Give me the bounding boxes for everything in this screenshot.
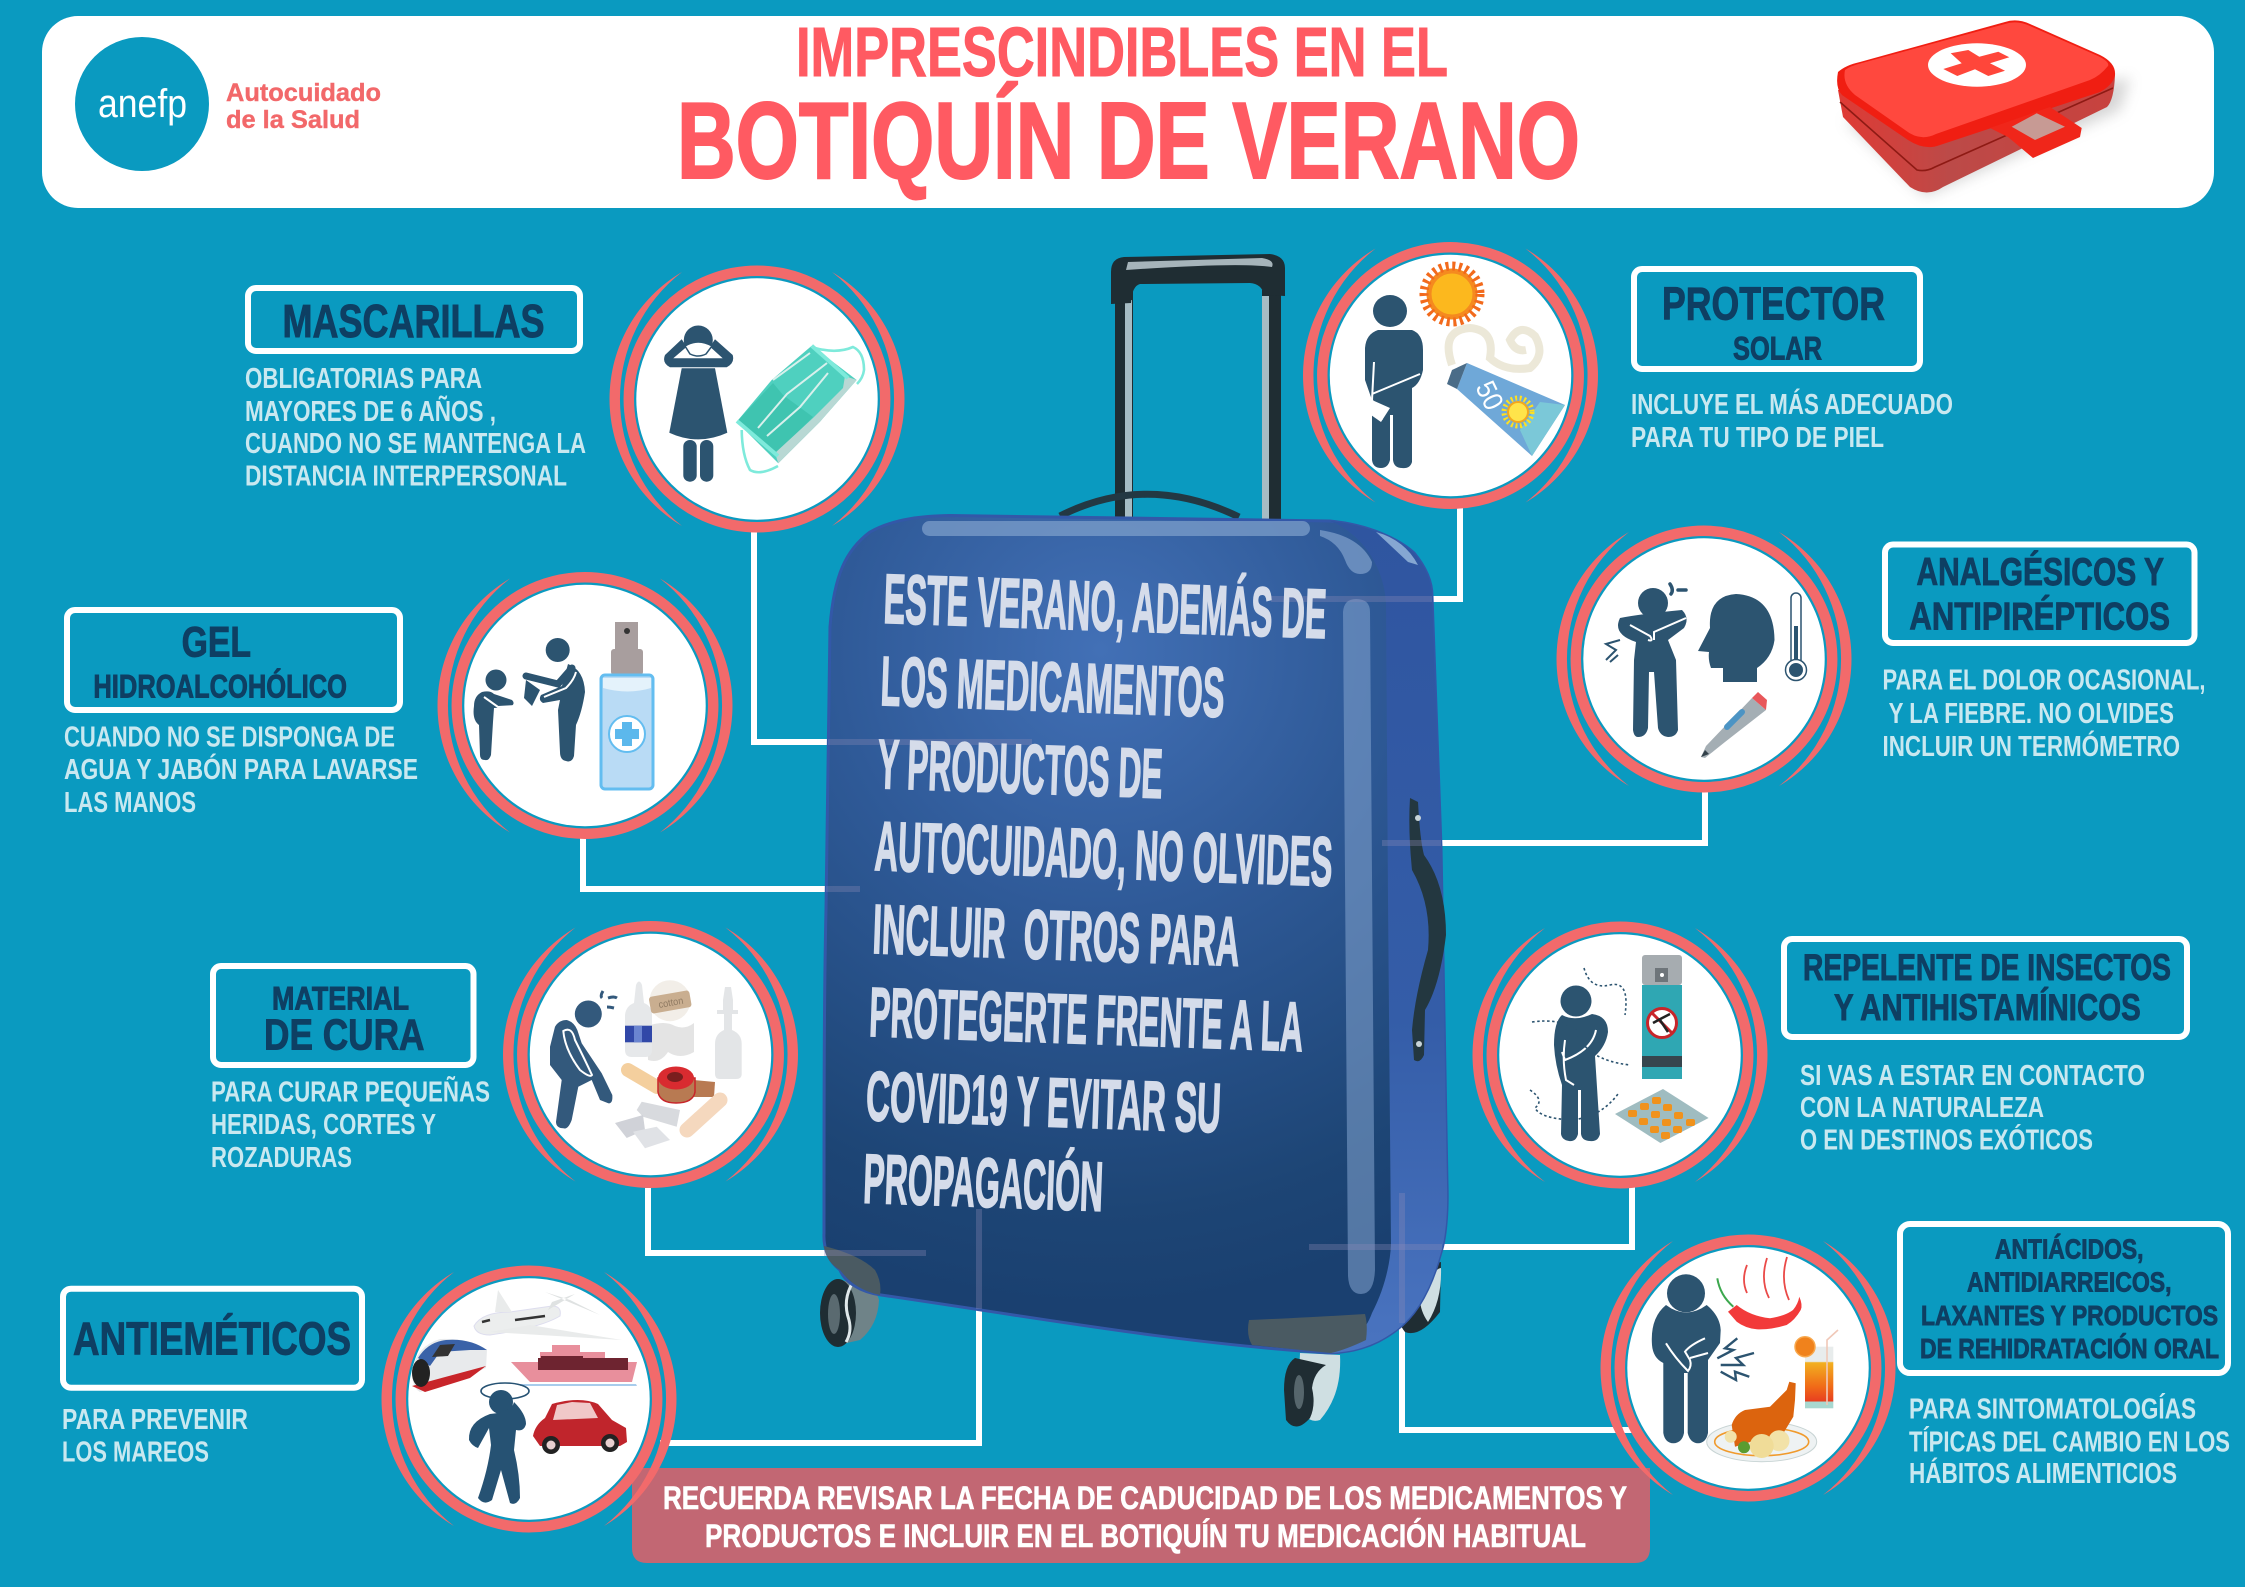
title: IMPRESCINDIBLES EN EL — [796, 13, 1448, 91]
dizzy person — [469, 1383, 529, 1504]
translucent connector overlays — [824, 596, 1442, 1323]
suitcase side panel — [1330, 521, 1447, 1353]
description — [62, 1404, 248, 1469]
heading box — [213, 966, 474, 1065]
description: ROZADURAS — [211, 1142, 352, 1174]
top carry handle — [1060, 494, 1239, 517]
car — [533, 1400, 627, 1454]
description: HÁBITOS ALIMENTICIOS — [1909, 1456, 2177, 1490]
suitcase: AUTOCUIDADO, NO OLVIDES — [873, 807, 1334, 901]
logo: anefp — [75, 37, 381, 171]
icon: injured person and first aid material — [503, 926, 798, 1183]
icon: first aid kit — [1837, 20, 2130, 196]
heading box: PROTECTOR — [1662, 278, 1885, 330]
callout banner: RECUERDA REVISAR LA FECHA DE CADUCIDAD DE LOS MEDICAMENTOS Y — [663, 1480, 1627, 1516]
panel: mascarillas — [245, 271, 904, 527]
heading box: Y ANTIHISTAMÍNICOS — [1834, 987, 2141, 1028]
description: INCLUYE EL MÁS ADECUADO — [1631, 387, 1953, 421]
suitcase: PROTEGERTE FRENTE A LA — [868, 973, 1305, 1066]
icon: adult, child and hand sanitizer — [438, 577, 732, 834]
icon: person with bites, repellent and pills — [1473, 927, 1767, 1183]
heading box: ANTIÁCIDOS, — [1995, 1233, 2144, 1264]
suitcase message: COVID19 Y EVITAR SU — [865, 1057, 1222, 1147]
description — [64, 721, 418, 819]
heading box — [67, 610, 400, 710]
heading box — [248, 288, 580, 351]
description: LOS MAREOS — [62, 1437, 209, 1469]
heading box: DE CURA — [264, 1010, 424, 1059]
panel: material de cura — [211, 926, 798, 1183]
suitcase — [820, 254, 1447, 1427]
description — [211, 1074, 490, 1174]
connector lines — [583, 508, 1705, 1443]
suitcase message: LOS MEDICAMENTOS — [879, 642, 1226, 732]
description: CUANDO NO SE DISPONGA DE — [64, 721, 395, 753]
side handle — [1409, 798, 1446, 1061]
heading box: ANTIDIARREICOS, — [1967, 1267, 2172, 1298]
description — [1631, 387, 1953, 454]
suitcase highlights — [922, 521, 1418, 1294]
icon: person, sun and sunscreen: 50 — [1470, 376, 1510, 415]
icon: dizzy person and transport — [382, 1271, 676, 1527]
suitcase message: INCLUIR OTROS PARA — [871, 890, 1241, 981]
icon: person with stomach ache and food — [1601, 1240, 1895, 1496]
description — [1800, 1060, 2145, 1156]
title — [677, 13, 1580, 202]
icon: injured person and first aid material: cotton — [658, 996, 684, 1011]
heading box — [1885, 544, 2194, 643]
icon: person, sun and sunscreen — [1303, 247, 1598, 504]
description: MAYORES DE 6 AÑOS , — [245, 394, 496, 428]
logo: anefp: Autocuidado — [226, 79, 381, 107]
panel: repelente de insectos y antihistaminicos — [1473, 927, 2187, 1183]
description: PARA CURAR PEQUEÑAS — [211, 1074, 490, 1108]
ship — [511, 1345, 637, 1386]
logo: anefp: anefp — [98, 82, 187, 126]
description: DISTANCIA INTERPERSONAL — [245, 460, 567, 492]
panel: antiacidos, antidiarreicos, laxantes — [1601, 1224, 2230, 1496]
suitcase body — [824, 516, 1447, 1353]
telescopic handle — [1111, 254, 1285, 530]
plane — [474, 1290, 622, 1340]
suitcase message — [862, 560, 1334, 1226]
heading box: ANTIPIRÉPTICOS — [1909, 594, 2170, 638]
description — [1882, 665, 2206, 763]
wheels — [820, 1262, 1441, 1427]
heading box — [1784, 939, 2187, 1037]
description — [245, 363, 586, 492]
heading box: MATERIAL — [272, 980, 409, 1016]
train — [412, 1339, 487, 1392]
heading box — [1634, 269, 1920, 369]
description: LAS MANOS — [64, 787, 196, 819]
description: OBLIGATORIAS PARA — [245, 363, 482, 395]
description: SI VAS A ESTAR EN CONTACTO — [1800, 1060, 2145, 1092]
heading box: GEL — [182, 619, 251, 667]
icon: sick person, head and thermometers — [1557, 531, 1851, 787]
heading box: MASCARILLAS — [282, 295, 544, 347]
suitcase corner protectors — [824, 1246, 1367, 1353]
icon: person and face mask — [610, 271, 904, 527]
logo: anefp: de la Salud — [226, 106, 360, 134]
suitcase: ESTE VERANO, ADEMÁS DE — [882, 560, 1328, 653]
heading box: ANTIEMÉTICOS — [73, 1312, 351, 1364]
suitcase message: Y PRODUCTOS DE — [876, 725, 1164, 813]
description: O EN DESTINOS EXÓTICOS — [1800, 1122, 2093, 1156]
heading box — [1900, 1224, 2228, 1373]
callout banner — [632, 1468, 1650, 1563]
description: PARA TU TIPO DE PIEL — [1631, 422, 1884, 454]
header panel — [42, 13, 2214, 208]
description: CON LA NATURALEZA — [1800, 1092, 2044, 1124]
heading box: ANALGÉSICOS Y — [1916, 550, 2164, 594]
heading box: HIDROALCOHÓLICO — [93, 668, 347, 704]
panel: gel hidroalcoholico — [64, 577, 732, 834]
heading box: SOLAR — [1733, 330, 1822, 366]
description: HERIDAS, CORTES Y — [211, 1109, 436, 1141]
description: PARA PREVENIR — [62, 1404, 248, 1436]
description — [1909, 1391, 2230, 1490]
heading box — [63, 1289, 362, 1388]
description: CUANDO NO SE MANTENGA LA — [245, 428, 586, 460]
panel: antiemeticos — [62, 1271, 676, 1527]
panel: analgesicos y antipireticos — [1557, 531, 2206, 787]
suitcase message: PROPAGACIÓN — [862, 1140, 1105, 1226]
title: BOTIQUÍN DE VERANO — [677, 80, 1580, 202]
description: AGUA Y JABÓN PARA LAVARSE — [64, 752, 418, 786]
panel: protector solar — [1303, 247, 1953, 504]
callout banner: PRODUCTOS E INCLUIR EN EL BOTIQUÍN TU MEDICACIÓN HABITUAL — [705, 1518, 1586, 1554]
